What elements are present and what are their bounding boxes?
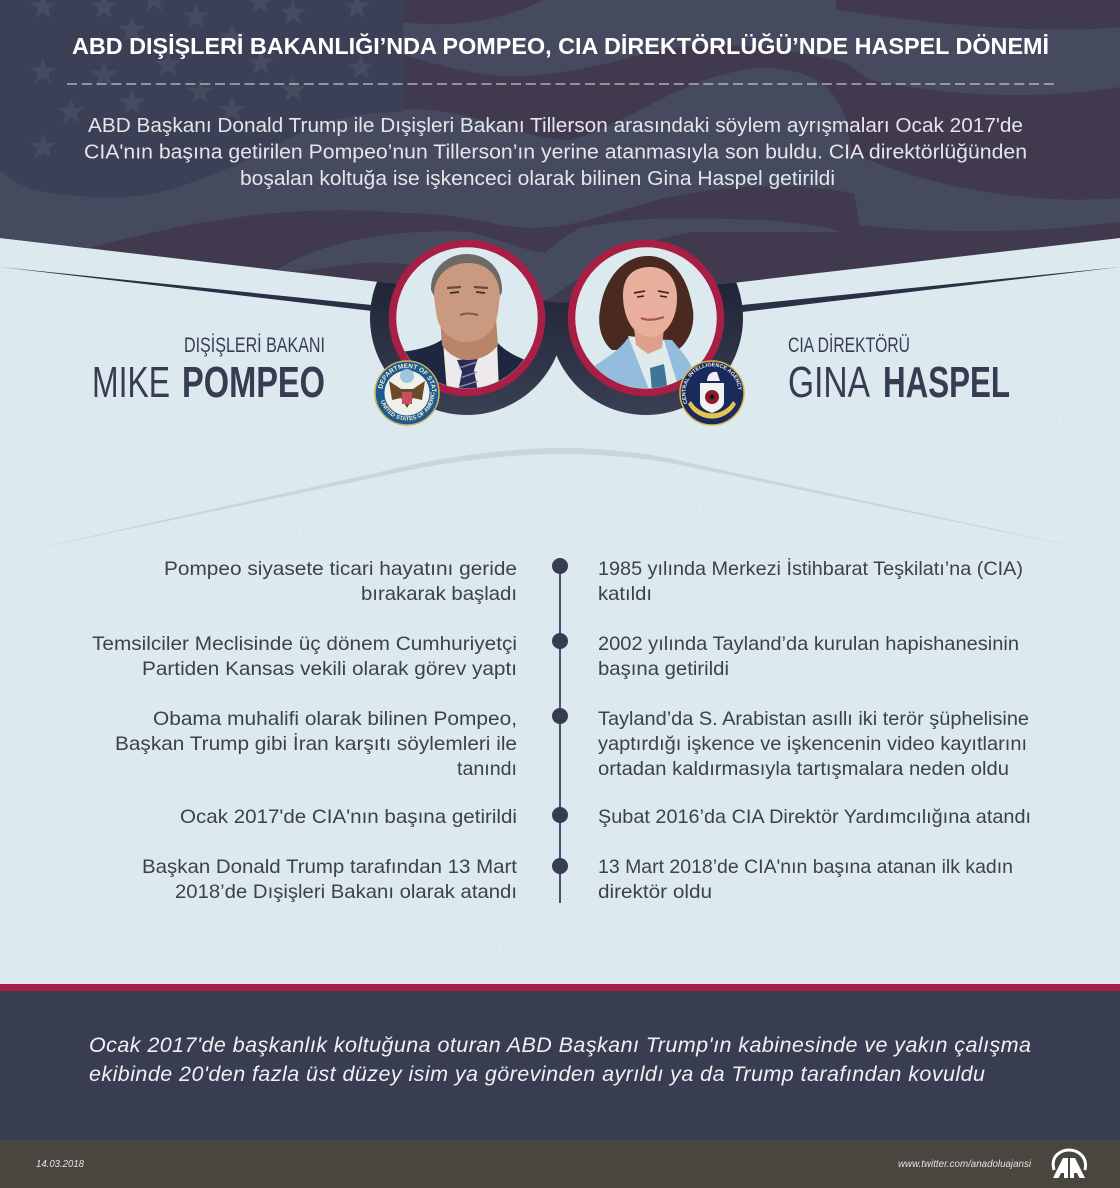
intro paragraph: ABD Başkanı Donald Trump ile Dışişleri Bakanı Tillerson arasındaki söylem ayrışmaları Ocak 2017'de: [88, 115, 1023, 137]
tie: [457, 358, 478, 388]
flag header background: [0, 0, 1120, 310]
Pompeo timeline text: Ocak 2017'de CIA'nın başına getirildi: [180, 806, 517, 828]
portrait: Gina Haspel: [572, 244, 720, 395]
portrait: Mike Pompeo: [392, 244, 542, 400]
hair: [431, 254, 502, 300]
paper texture specks: [39, 299, 1081, 951]
canton stars: [30, 0, 374, 158]
seal: Department of State: DEPARTMENT OF STATE: [378, 364, 437, 392]
blazer: [594, 338, 692, 388]
blouse and scarf: [628, 336, 677, 388]
seal: Department of State: [374, 360, 440, 426]
Haspel timeline text: [598, 557, 1031, 903]
neck: [634, 328, 664, 354]
footer bar: 14.03.2018: [36, 1159, 84, 1170]
Pompeo name block: POMPEO: [182, 358, 325, 407]
Pompeo timeline text: Temsilciler Meclisinde üç dönem Cumhuriyetçi: [92, 633, 517, 655]
title divider: [67, 83, 1054, 85]
Haspel timeline text: katıldı: [598, 583, 652, 605]
intro paragraph: boşalan koltuğa ise işkenceci olarak bilinen Gina Haspel getirildi: [240, 168, 835, 190]
Haspel timeline text: ortadan kaldırmasıyla tartışmalara neden oldu: [598, 758, 1009, 780]
Haspel timeline text: Şubat 2016’da CIA Direktör Yardımcılığına atandı: [598, 806, 1031, 828]
brows eyes mouth: [447, 287, 488, 288]
Pompeo timeline text: Başkan Trump gibi İran karşıtı söylemleri ile: [115, 732, 517, 755]
hair: [599, 256, 693, 350]
Pompeo name block: DIŞİŞLERİ BAKANI: [184, 334, 325, 357]
Haspel timeline text: yaptırdığı işkence ve işkencenin video kayıtlarını: [598, 733, 1027, 755]
brows eyes smile: [634, 291, 669, 293]
Haspel timeline text: başına getirildi: [598, 658, 729, 680]
bottom note panel: [0, 991, 1120, 1140]
bottom note panel: ekibinde 20'den fazla üst düzey isim ya görevinden ayrıldı ya da Trump tarafından kovuldu: [89, 1062, 985, 1086]
Pompeo timeline text: [92, 558, 518, 903]
Haspel name block: CIA DİREKTÖRÜ: [788, 334, 910, 357]
icon: Anadolu Agency logo: [1053, 1150, 1086, 1178]
Pompeo timeline text: bırakarak başladı: [361, 583, 517, 605]
crimson band: [0, 984, 1120, 992]
face: [434, 263, 500, 342]
Pompeo name block: [92, 334, 325, 407]
flag canton: [0, 110, 403, 197]
intro paragraph: [84, 115, 1027, 190]
Haspel timeline text: 13 Mart 2018’de CIA'nın başına atanan ilk kadın: [598, 856, 1013, 878]
footer bar: [0, 1140, 1120, 1188]
Haspel timeline text: Tayland’da S. Arabistan asıllı iki terör şüphelisine: [598, 708, 1029, 730]
intro paragraph: CIA'nın başına getirilen Pompeo’nun Tillerson’ın yerine atanmasıyla son buldu. CIA direktörlüğünden: [84, 142, 1027, 164]
seal: CIA: CENTRAL INTELLIGENCE AGENCY: [682, 362, 742, 404]
face: [623, 267, 677, 337]
timeline axis: [552, 558, 568, 903]
Haspel name block: GINA: [788, 358, 870, 407]
Pompeo name block: MIKE: [92, 358, 170, 407]
Haspel timeline text: 2002 yılında Tayland’da kurulan hapishanesinin: [598, 633, 1019, 655]
Pompeo timeline text: Pompeo siyasete ticari hayatını geride: [164, 558, 517, 580]
neck: [440, 318, 498, 360]
bottom note panel: Ocak 2017'de başkanlık koltuğuna oturan ABD Başkanı Trump'ın kabinesinde ve yakın çalışma: [89, 1033, 1031, 1057]
curved divider: [15, 448, 1105, 553]
Pompeo timeline text: Başkan Donald Trump tarafından 13 Mart: [142, 856, 518, 878]
Haspel timeline text: direktör oldu: [598, 881, 712, 903]
shirt collar: [443, 346, 499, 388]
portrait backing rings: [370, 221, 743, 415]
suit: [405, 340, 524, 388]
Haspel timeline text: 1985 yılında Merkezi İstihbarat Teşkilatı’na (CIA): [598, 557, 1023, 580]
Pompeo timeline text: tanındı: [457, 758, 517, 780]
right pointer line: [742, 267, 1120, 312]
seal: Department of State: UNITED STATES OF AMERICA: [381, 392, 434, 420]
title: ABD DIŞİŞLERİ BAKANLIĞI’NDA POMPEO, CIA DİREKTÖRLÜĞÜ’NDE HASPEL DÖNEMİ: [72, 32, 1049, 59]
flag wave stripes: [0, 0, 1120, 300]
Pompeo timeline text: Partiden Kansas vekili olarak görev yaptı: [142, 658, 517, 680]
Haspel name block: [788, 334, 1010, 407]
left pointer line: [0, 267, 372, 311]
Haspel name block: HASPEL: [883, 358, 1010, 407]
seal: CIA: [679, 360, 745, 426]
footer bar: www.twitter.com/anadoluajansi: [898, 1158, 1032, 1170]
Pompeo timeline text: 2018’de Dışişleri Bakanı olarak atandı: [175, 881, 517, 903]
Pompeo timeline text: Obama muhalifi olarak bilinen Pompeo,: [153, 708, 517, 730]
